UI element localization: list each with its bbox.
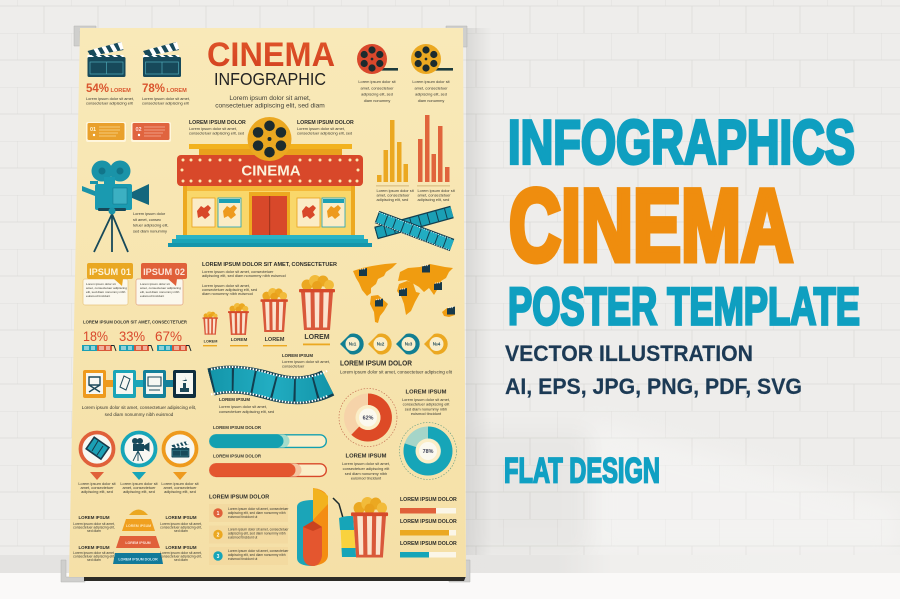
progress bars: [210, 425, 326, 476]
callout: ipsum 02: IPSUM 02: [143, 267, 185, 277]
list item 1: Lorem ipsum dolor sit amet, consectetuer: [228, 507, 288, 511]
pyramid label top left: Lorem ipsum dolor sit amet,: [73, 522, 115, 526]
popcorn labels: LOREM: [204, 340, 217, 344]
pyramid tier cap: [129, 510, 148, 515]
popcorn heading and text: adipiscing elit, sed diam nonummy nibh euismod: [202, 273, 286, 278]
step: screen: [143, 370, 166, 398]
progress heading 1: LOREM IPSUM DOLOR: [213, 425, 262, 430]
camera caption: sed diam nonummy: [133, 228, 167, 233]
right horizontal bars: [400, 497, 457, 558]
popcorn 4: [299, 275, 335, 330]
process row: [82, 370, 196, 417]
map markers: [359, 268, 367, 276]
pin 2: №2: [377, 342, 385, 347]
film wave caption right: consectetuer: [282, 364, 305, 369]
film wave caption left: Lorem ipsum dolor sit amet,: [219, 404, 267, 409]
list item 2: 2: [217, 532, 220, 538]
film wave caption left: LOREM IPSUM: [219, 397, 250, 402]
pyramid label bottom right: [160, 545, 202, 562]
donut chart 62 percent: 62%: [363, 416, 374, 422]
donut caption bottom: sed diam nonummy nibh: [345, 471, 387, 476]
popcorn heading and text: Lorem ipsum dolor sit amet,: [202, 283, 250, 288]
popcorn heading and text: [202, 262, 337, 296]
callout: ipsum 01: elit, sed diam nonummy nibh: [86, 290, 126, 294]
pin icons row: amet, consectetuer: [163, 485, 197, 490]
process caption: Lorem ipsum dolor sit amet, consectetuer adipiscing elit,: [82, 405, 196, 410]
pin 4: №4: [433, 342, 441, 347]
pyramid label bottom left: sed diam: [87, 558, 101, 562]
reel caption 2: diam nonummy: [418, 98, 444, 103]
marquee sign: CINEMA: [241, 162, 301, 180]
pyramid label top right: [160, 515, 202, 533]
subheading: vector illustration: VECTOR ILLUSTRATION: [505, 341, 753, 366]
pin icons row: [78, 432, 200, 494]
cinema caption left: [189, 120, 246, 136]
reel caption 2: adipiscing elit, sed: [415, 92, 447, 97]
world map: [353, 263, 455, 323]
pin captions: Lorem ipsum dolor sit: [78, 481, 116, 486]
camera reels: [92, 160, 112, 182]
pyramid label bottom right: Lorem ipsum dolor sit amet,: [160, 551, 202, 555]
donut caption bottom: consectetuer adipiscing elit: [343, 466, 390, 471]
film strips crossing: [376, 212, 452, 250]
camera caption: sit amet, consec: [133, 217, 161, 222]
poster base shadow: [84, 576, 466, 581]
popcorn growth chart: LOREM: [304, 334, 330, 341]
list item 3: euismod tincidunt ut: [228, 557, 257, 561]
camera caption: tetuer adipiscing elit,: [133, 223, 168, 228]
list heading: LOREM IPSUM DOLOR: [209, 494, 269, 500]
pin icons row: Lorem ipsum dolor sit: [120, 481, 158, 486]
camera caption: Lorem ipsum dolor: [133, 211, 165, 216]
cinema caption right: Lorem ipsum dolor sit amet,: [297, 126, 345, 131]
pin: clapper: [164, 432, 196, 480]
title: cinema: CINEMA: [207, 36, 335, 74]
bar chart caption 1: Lorem ipsum dolor sit: [376, 188, 414, 193]
stat: 54 percent: 54% LOREM: [86, 83, 131, 95]
stat caption 2: Lorem ipsum dolor sit amet,: [142, 96, 190, 101]
icon: glasses 1: [82, 345, 116, 351]
list item 2: [213, 528, 289, 540]
popcorn heading and text: Lorem ipsum dolor sit amet, consectetuer: [202, 269, 273, 274]
camera body: [95, 184, 132, 210]
progress bar teal: [210, 434, 326, 448]
bar chart: orange: [376, 120, 409, 186]
callout: ipsum 01: Lorem ipsum dolor sit: [86, 282, 116, 286]
progress heading 2: LOREM IPSUM DOLOR: [213, 454, 262, 458]
pyramid chart: [113, 510, 163, 564]
cinema caption left: LOREM IPSUM DOLOR: [189, 120, 246, 126]
posters: [192, 198, 345, 227]
callout: ipsum 01: IPSUM 01: [89, 267, 131, 277]
tripod: [94, 214, 128, 252]
film wave caption left: [219, 397, 274, 414]
pyramid tier 4: LOREM IPSUM DOLOR: [118, 558, 158, 562]
cinema caption right: consectetuer adipiscing elit, sed: [297, 131, 352, 136]
icon: red reel: [357, 44, 398, 74]
poster sheet: [69, 28, 466, 577]
donut chart 78 percent: 78%: [423, 449, 434, 455]
progress bar red: [210, 464, 326, 476]
list item 1: adipiscing elit, sed diam nonummy nibh: [228, 511, 286, 515]
film reel on roof: [248, 117, 292, 161]
pin: camera: [122, 432, 156, 480]
donut caption top: consectetuer adipiscing elit: [403, 402, 450, 407]
donut caption bottom: euismod tincidunt: [351, 476, 382, 481]
donut chart 78 percent: [400, 422, 456, 480]
bar chart caption 2: amet, consectetuer: [418, 193, 451, 198]
callout: ipsum 02: amet, consectetuer adipiscing: [140, 286, 181, 290]
soda cup: [339, 516, 361, 557]
donut caption top: sed diam nonummy nibh: [405, 406, 447, 411]
icon: clapperboard 2: [143, 42, 181, 77]
popcorn 3: [260, 288, 288, 332]
list item 3: 3: [217, 554, 220, 560]
pins caption: Lorem ipsum dolor sit amet, consectetuer adipiscing elit: [340, 370, 453, 374]
option tabs: [86, 122, 171, 142]
popcorn heading and text: consectetuer adipiscing elit, sed: [202, 287, 257, 292]
pyramid label bottom right: LOREM IPSUM: [166, 545, 197, 550]
pyramid tier 3: LOREM IPSUM: [125, 541, 151, 545]
donut caption top: euismod tincidunt: [411, 411, 442, 416]
connectors: [106, 380, 113, 387]
pin captions: adipiscing elit, sed: [81, 489, 113, 494]
pyramid label top left: consectetuer adipiscing elit,: [73, 526, 115, 530]
straw: [333, 498, 343, 518]
callout: ipsum 01: [83, 263, 133, 305]
cinema caption right: [297, 120, 354, 136]
clapperboard stats: [86, 42, 190, 106]
reel caption 1: amet, consectetuer: [360, 85, 394, 90]
reel caption 1: Lorem ipsum dolor sit: [358, 79, 396, 84]
stat 18: 18%: [83, 328, 108, 344]
film reels top right: [357, 44, 453, 103]
popcorn heading and text: diam nonummy nibh euismod: [202, 291, 253, 296]
step: director chair: [83, 370, 106, 398]
pyramid label top left: LOREM IPSUM: [79, 515, 110, 520]
pin icons row: adipiscing elit, sed: [164, 489, 196, 494]
roof: [189, 144, 352, 149]
cinema caption right: LOREM IPSUM DOLOR: [297, 120, 354, 126]
donut caption top: LOREM IPSUM: [406, 390, 447, 396]
reel caption 1: diam nonummy: [364, 98, 390, 103]
popcorn underlines: [203, 345, 217, 346]
pin: film: [80, 432, 114, 480]
callout: ipsum 02: elit, sed diam nonummy nibh: [140, 290, 180, 294]
intro text: Lorem ipsum dolor sit amet,: [229, 95, 311, 102]
list item 2: euismod tincidunt ut: [228, 536, 257, 540]
donut caption top: Lorem ipsum dolor sit amet,: [402, 397, 450, 402]
film wave caption right: LOREM IPSUM: [282, 353, 313, 358]
donut chart 62 percent: [339, 388, 397, 446]
callout: ipsum 02: [136, 263, 187, 305]
pyramid label top left: [73, 515, 115, 533]
film wave: [211, 367, 328, 403]
pyramid label top right: consectetuer adipiscing elit,: [160, 526, 202, 530]
subtitle: infographic: INFOGRAPHIC: [214, 69, 326, 89]
step: award: [173, 370, 196, 398]
pyramid label bottom right: consectetuer adipiscing elit,: [160, 554, 202, 558]
right horizontal bars: LOREM IPSUM DOLOR: [400, 497, 457, 503]
percent stats with 3d glasses: [82, 320, 191, 351]
tab 01: 01: [90, 127, 96, 133]
stairs: [176, 235, 364, 239]
callout: ipsum 02: Lorem ipsum dolor sit: [140, 282, 170, 286]
pyramid label top left: sed diam: [87, 529, 101, 533]
pyramid label bottom left: LOREM IPSUM: [79, 545, 110, 550]
stat caption 1: Lorem ipsum dolor sit amet,: [86, 96, 134, 101]
heading: cinema: CINEMA: [509, 168, 793, 282]
movie camera: [82, 160, 149, 252]
popcorn heading and text: LOREM IPSUM DOLOR SIT AMET, CONSECTETUER: [202, 262, 337, 268]
process caption: sed diam nonummy nibh euismod: [105, 412, 174, 417]
pin captions: amet, consectetuer: [80, 485, 114, 490]
pin icons row: adipiscing elit, sed: [123, 489, 155, 494]
pyramid label bottom right: sed diam: [174, 558, 188, 562]
bar chart caption 1: adipiscing elit, sed: [376, 197, 408, 202]
icon: glasses 3: [157, 345, 191, 351]
pin 3: №3: [405, 342, 413, 347]
pyramid label top right: sed diam: [174, 529, 188, 533]
callout: ipsum 01: euismod tincidunt: [86, 294, 110, 298]
stat caption 2: consectetuer adipiscing elit: [142, 101, 190, 106]
pins heading: LOREM IPSUM DOLOR: [340, 360, 412, 368]
title: [207, 36, 335, 110]
film wave caption right: [282, 353, 330, 369]
list item 2: adipiscing elit, sed diam nonummy nibh: [228, 532, 286, 536]
3d cylinder chart: [297, 488, 328, 566]
callout: ipsum 02: euismod tincidunt: [140, 294, 164, 298]
pyramid tier 2: LOREM IPSUM: [126, 524, 151, 528]
cinema caption left: Lorem ipsum dolor sit amet,: [189, 126, 237, 131]
numbered pins: [340, 334, 448, 354]
door: [249, 192, 290, 236]
intro text: consectetuer adipiscing elit, sed diam: [215, 103, 325, 110]
pin 1: №1: [349, 342, 357, 347]
popcorn 2: [228, 303, 249, 335]
pyramid label bottom left: Lorem ipsum dolor sit amet,: [73, 551, 115, 555]
stats heading: LOREM IPSUM DOLOR SIT AMET, CONSECTETUER: [83, 320, 188, 324]
bar chart caption 1: amet, consectetuer: [376, 193, 410, 198]
stat 67: 67%: [155, 328, 182, 344]
reel caption 2: amet, consectetuer: [414, 85, 448, 90]
film wave caption left: consectetuer adipiscing elit, sed: [219, 409, 274, 414]
right horizontal bars: LOREM IPSUM DOLOR: [400, 519, 457, 525]
popcorn growth chart: LOREM: [265, 337, 285, 343]
bar chart caption 2: Lorem ipsum dolor sit: [418, 188, 455, 193]
step: tickets: [113, 370, 136, 398]
facade: [183, 186, 355, 236]
cinema building: [168, 117, 372, 247]
pyramid label top right: LOREM IPSUM: [166, 515, 197, 520]
pin icons row: Lorem ipsum dolor sit: [161, 481, 199, 486]
donut caption bottom: LOREM IPSUM: [346, 454, 387, 460]
reel caption 2: Lorem ipsum dolor sit: [412, 79, 450, 84]
list item 3: adipiscing elit, sed diam nonummy nibh: [228, 553, 286, 557]
icon: glasses 2: [119, 345, 153, 351]
ipsum callouts: [83, 263, 187, 305]
popcorn growth chart: [202, 275, 335, 346]
pyramid label top right: Lorem ipsum dolor sit amet,: [160, 522, 202, 526]
right horizontal bars: LOREM IPSUM DOLOR: [400, 541, 457, 547]
tab 02: 02: [136, 127, 142, 133]
bar chart caption 2: adipiscing elit, sed: [418, 197, 449, 202]
continents: [353, 263, 455, 323]
list item 1: [213, 507, 289, 519]
film wave caption right: Lorem ipsum dolor sit amet,: [282, 359, 330, 364]
pin icons row: amet, consectetuer: [122, 485, 156, 490]
icon: orange reel: [411, 44, 453, 74]
marquee: [177, 155, 363, 186]
stat 33: 33%: [119, 328, 145, 344]
popcorn bucket: [351, 497, 388, 558]
callout: ipsum 01: amet, consectetuer adipiscing: [86, 286, 127, 290]
label: flat design: FLAT DESIGN: [504, 452, 660, 490]
bar chart: red: [417, 115, 450, 186]
list item 3: [213, 549, 289, 561]
popcorn and soda: [333, 497, 388, 558]
donut caption top: [402, 390, 450, 416]
donut caption bottom: Lorem ipsum dolor sit amet,: [342, 461, 390, 466]
reel caption 1: adipiscing elit, sed: [361, 92, 393, 97]
list item 3: Lorem ipsum dolor sit amet, consectetuer: [228, 549, 288, 553]
numbered list: [209, 494, 289, 565]
list item 1: 1: [217, 511, 220, 517]
poster clips: [61, 26, 470, 582]
popcorn growth chart: LOREM: [231, 337, 247, 342]
list strips: [209, 504, 288, 522]
icon: clapperboard 1: [88, 42, 126, 77]
list item 1: euismod tincidunt ut: [228, 515, 257, 519]
cinema caption left: consectetuer adipiscing elit, sed: [189, 131, 244, 136]
stat caption 1: consectetuer adipiscing elit: [86, 101, 134, 106]
pyramid label bottom left: consectetuer adipiscing elit,: [73, 554, 115, 558]
pyramid label bottom left: [73, 545, 115, 562]
donut caption bottom: [342, 454, 390, 481]
subheading: file formats: AI, EPS, JPG, PNG, PDF, SVG: [505, 374, 802, 399]
stat: 78 percent: 78% LOREM: [142, 83, 187, 95]
popcorn 1: [202, 312, 218, 335]
list item 2: Lorem ipsum dolor sit amet, consectetuer: [228, 528, 288, 532]
